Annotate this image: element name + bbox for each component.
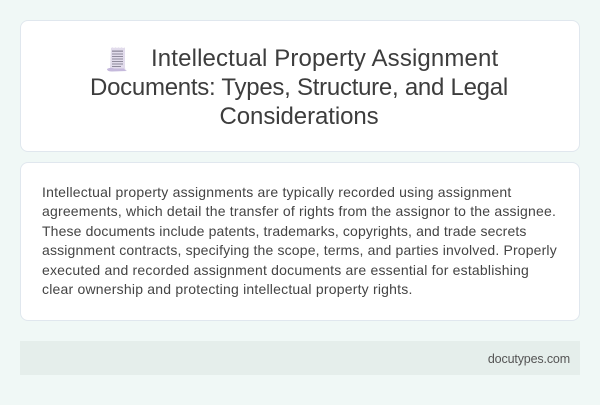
text block: description: executed and recorded assignment documents are essential for establishing bbox=[42, 262, 529, 278]
footer source text: docutypes.com bbox=[488, 352, 570, 366]
text block: description: Intellectual property assignments are typically recorded using assignment bbox=[42, 184, 511, 200]
title bbox=[90, 45, 508, 130]
panel: description card bbox=[20, 162, 580, 321]
title: Intellectual Property Assignment bbox=[151, 45, 498, 72]
text block: description: These documents include patents, trademarks, copyrights, and trade secrets bbox=[42, 223, 527, 239]
title: Documents: Types, Structure, and Legal bbox=[90, 74, 508, 101]
text block: description bbox=[42, 184, 557, 297]
text block: description: clear ownership and protecting intellectual property rights. bbox=[42, 281, 413, 297]
footer bar bbox=[20, 341, 580, 375]
panel: title card bbox=[20, 20, 580, 152]
text block: description: assignment contracts, specifying the scope, terms, and parties involved. Properly bbox=[42, 242, 557, 258]
icon: document scroll bbox=[107, 48, 127, 72]
title: Considerations bbox=[220, 103, 379, 130]
text block: description: agreements, which detail the transfer of rights from the assignor to the assignee. bbox=[42, 203, 556, 219]
